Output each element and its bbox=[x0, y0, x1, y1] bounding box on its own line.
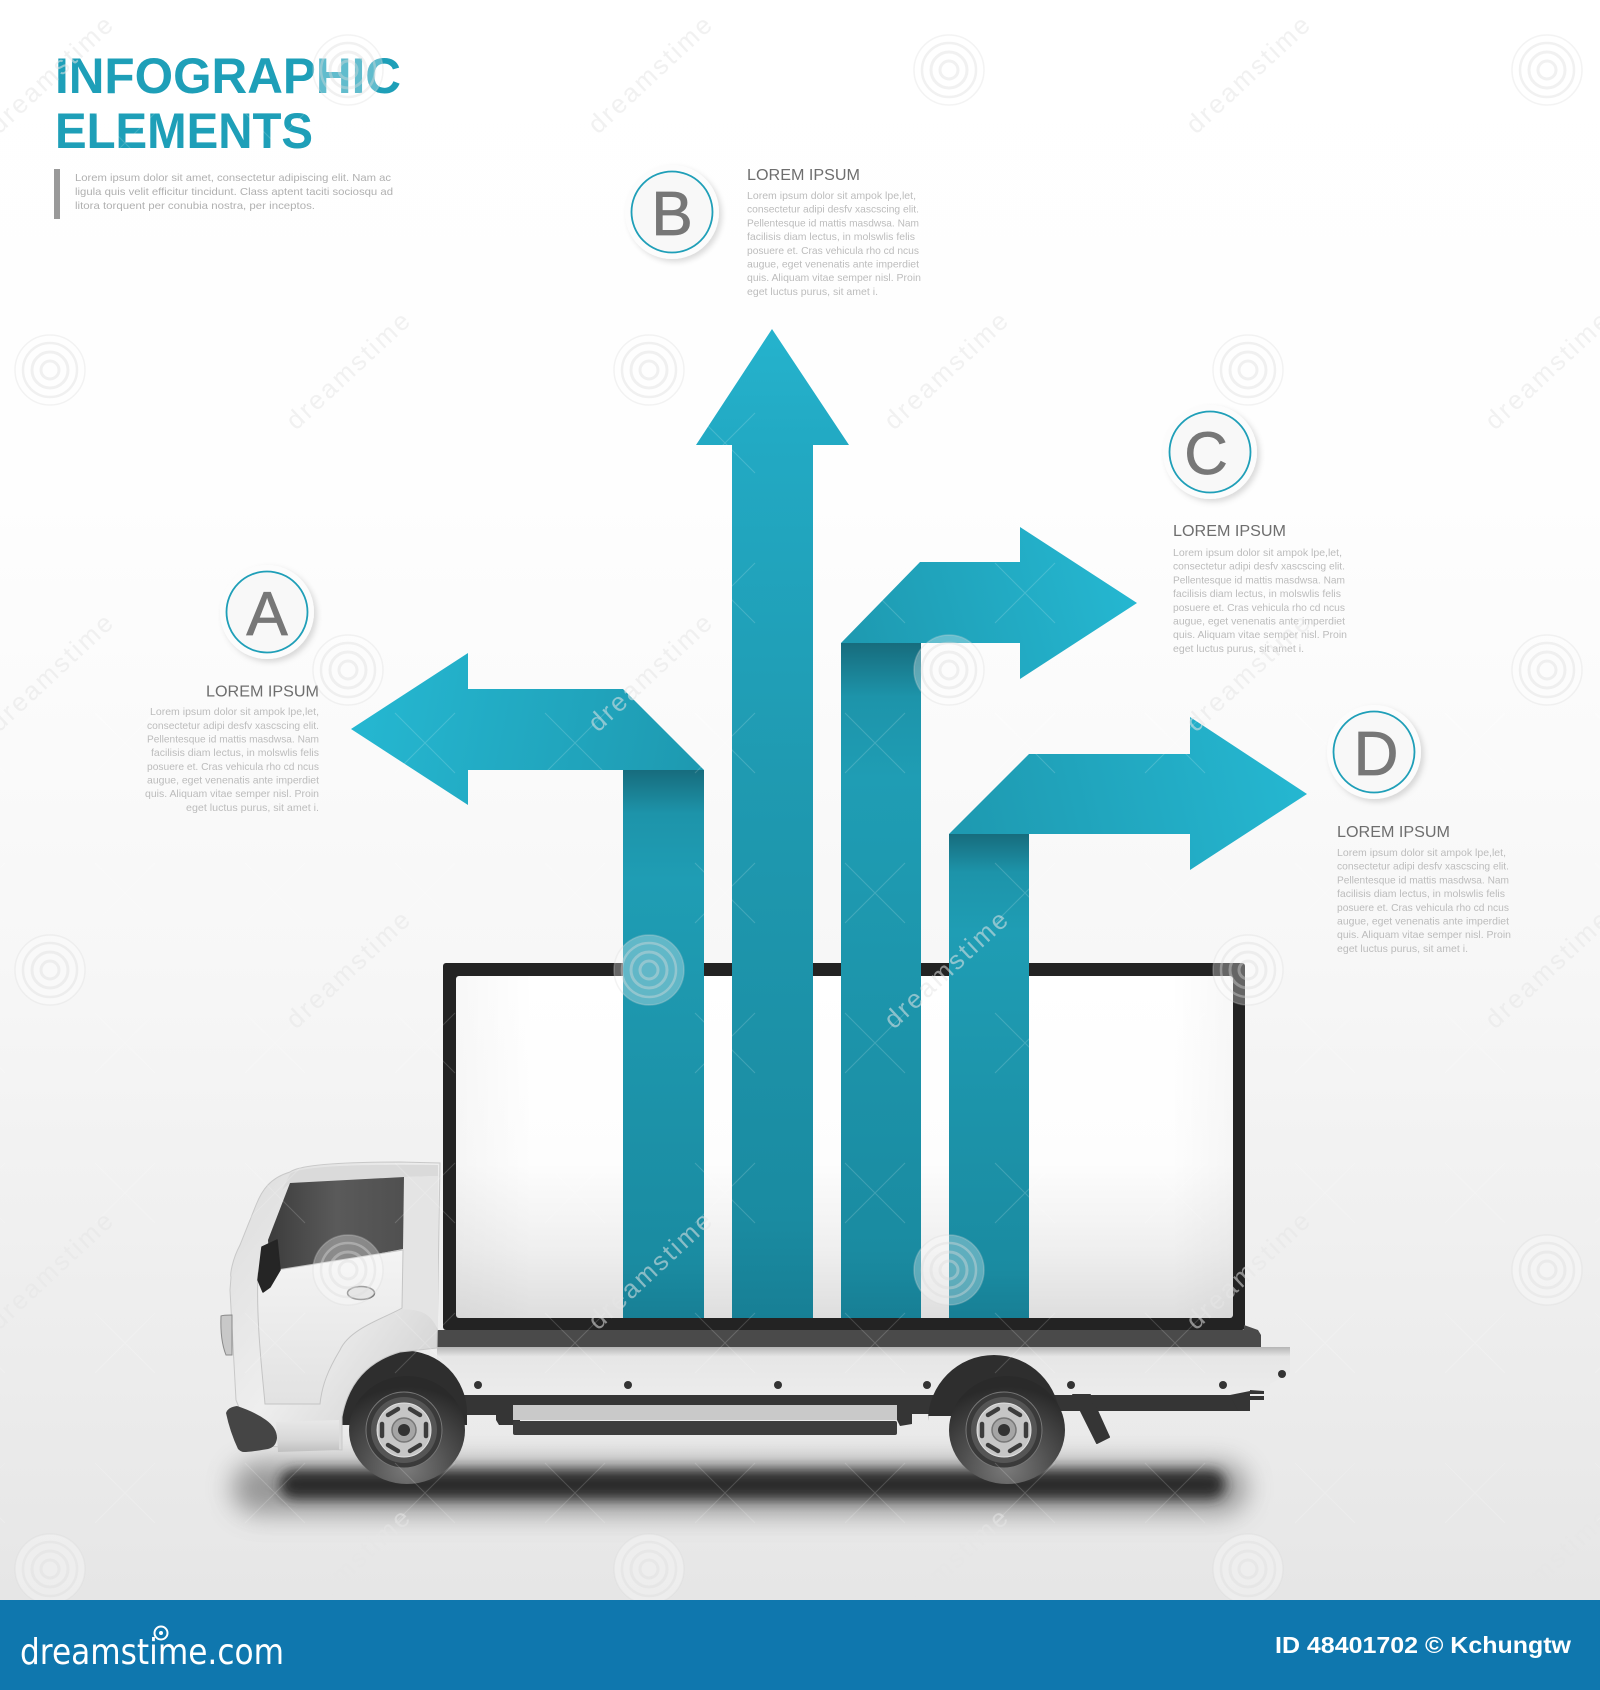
truck billboard screen bbox=[443, 963, 1245, 1330]
intro text block bbox=[54, 169, 393, 219]
truck bbox=[221, 1162, 1290, 1484]
arrow D: right-pointing bbox=[949, 717, 1307, 1318]
body text A: eget luctus purus, sit amet i. bbox=[186, 802, 319, 814]
watermark text: dreamstime bbox=[878, 905, 1014, 1034]
body text C: consectetur adipi desfv xascscing elit. bbox=[1173, 561, 1345, 573]
body text A: augue, eget venenatis ante imperdiet bbox=[147, 774, 319, 786]
watermark text: dreamstime bbox=[1180, 608, 1316, 737]
body text D: consectetur adipi desfv xascscing elit. bbox=[1337, 861, 1509, 873]
watermark text: dreamstime bbox=[1180, 10, 1316, 139]
watermark text: dreamstime bbox=[1180, 1206, 1316, 1335]
body text A bbox=[145, 706, 319, 814]
body text B bbox=[747, 190, 921, 298]
body text A: consectetur adipi desfv xascscing elit. bbox=[147, 720, 319, 732]
title bbox=[55, 48, 401, 159]
badge D: D bbox=[1354, 720, 1398, 789]
badge A: A bbox=[246, 580, 288, 649]
footer credit: ID 48401702 © Kchungtw bbox=[1275, 1632, 1571, 1658]
headlight bbox=[221, 1315, 232, 1355]
body text B: facilisis diam lectus, in molswlis felis bbox=[747, 231, 915, 243]
body text B: posuere et. Cras vehicula rho cd ncus bbox=[747, 245, 919, 257]
body text D: facilisis diam lectus, in molswlis felis bbox=[1337, 888, 1505, 900]
body text B: quis. Aliquam vitae semper nisl. Proin bbox=[747, 272, 921, 284]
body text D: eget luctus purus, sit amet i. bbox=[1337, 943, 1468, 955]
lower bumper bbox=[276, 1420, 339, 1452]
body text C: posuere et. Cras vehicula rho cd ncus bbox=[1173, 602, 1345, 614]
truck deck bar bbox=[437, 1325, 1261, 1347]
body text C bbox=[1173, 547, 1347, 655]
body text C: augue, eget venenatis ante imperdiet bbox=[1173, 616, 1345, 628]
intro text block: Lorem ipsum dolor sit amet, consectetur adipiscing elit. Nam ac bbox=[75, 172, 391, 184]
watermark text: dreamstime bbox=[878, 306, 1014, 435]
badge C: C bbox=[1184, 420, 1228, 487]
label B bbox=[625, 165, 921, 298]
watermark text: dreamstime bbox=[582, 608, 718, 737]
arrow C: right-pointing bbox=[841, 527, 1137, 1318]
label A bbox=[145, 565, 319, 814]
body text B: eget luctus purus, sit amet i. bbox=[747, 286, 878, 298]
body text A: facilisis diam lectus, in molswlis felis bbox=[151, 747, 319, 759]
body text C: quis. Aliquam vitae semper nisl. Proin bbox=[1173, 629, 1347, 641]
footer logo: dreamstime.com bbox=[20, 1632, 284, 1673]
heading B: LOREM IPSUM bbox=[747, 167, 860, 184]
intro text block: litora torquent per conubia nostra, per inceptos. bbox=[75, 200, 315, 212]
body text C: eget luctus purus, sit amet i. bbox=[1173, 643, 1304, 655]
watermark text: dreamstime bbox=[280, 1503, 416, 1632]
truck flatbed body bbox=[437, 1347, 1290, 1395]
body text C: Pellentesque id mattis masdwsa. Nam bbox=[1173, 574, 1345, 586]
label D bbox=[1327, 705, 1511, 955]
truck rivets bbox=[474, 1370, 1286, 1389]
badge B bbox=[625, 165, 719, 259]
cab door bbox=[258, 1250, 403, 1404]
truck wheel arches bbox=[342, 1351, 1060, 1425]
watermark text: dreamstime bbox=[582, 1206, 718, 1335]
cab roof highlight bbox=[282, 1165, 438, 1190]
body text C: facilisis diam lectus, in molswlis felis bbox=[1173, 588, 1341, 600]
body text D: Pellentesque id mattis masdwsa. Nam bbox=[1337, 874, 1509, 886]
front wheel bbox=[349, 1376, 465, 1484]
label C bbox=[1163, 405, 1347, 655]
heading D: LOREM IPSUM bbox=[1337, 824, 1450, 841]
door handle bbox=[348, 1286, 374, 1300]
body text B: Pellentesque id mattis masdwsa. Nam bbox=[747, 217, 919, 229]
rear wheel bbox=[949, 1376, 1065, 1484]
body text D: posuere et. Cras vehicula rho cd ncus bbox=[1337, 902, 1509, 914]
truck cab bbox=[221, 1162, 440, 1452]
truck chassis bbox=[460, 1390, 1264, 1443]
body text D: quis. Aliquam vitae semper nisl. Proin bbox=[1337, 929, 1511, 941]
arrow B: straight up bbox=[696, 329, 849, 1318]
body text D bbox=[1337, 847, 1511, 955]
truck shadow bbox=[232, 1462, 1247, 1514]
badge B: B bbox=[651, 180, 693, 249]
title: INFOGRAPHIC bbox=[55, 48, 401, 104]
truck side step bbox=[513, 1405, 897, 1435]
watermark text: dreamstime bbox=[582, 10, 718, 139]
cab window bbox=[268, 1177, 404, 1274]
body text A: Lorem ipsum dolor sit ampok lpe,let, bbox=[150, 706, 319, 718]
body text A: quis. Aliquam vitae semper nisl. Proin bbox=[145, 788, 319, 800]
body text B: Lorem ipsum dolor sit ampok lpe,let, bbox=[747, 190, 916, 202]
body text C: Lorem ipsum dolor sit ampok lpe,let, bbox=[1173, 547, 1342, 559]
title: ELEMENTS bbox=[55, 103, 313, 159]
body text A: Pellentesque id mattis masdwsa. Nam bbox=[147, 734, 319, 746]
watermark text: dreamstime bbox=[878, 1503, 1014, 1632]
intro text block: ligula quis velit efficitur tincidunt. Class aptent taciti sociosqu ad bbox=[75, 186, 393, 198]
badge C bbox=[1163, 405, 1257, 499]
footer banner bbox=[0, 1600, 1600, 1690]
body text A: posuere et. Cras vehicula rho cd ncus bbox=[147, 761, 319, 773]
badge D bbox=[1327, 705, 1421, 799]
cab pillar bbox=[402, 1176, 438, 1330]
heading A: LOREM IPSUM bbox=[206, 684, 319, 700]
badge A bbox=[220, 565, 314, 659]
watermark text: dreamstime bbox=[280, 905, 416, 1034]
body text D: augue, eget venenatis ante imperdiet bbox=[1337, 916, 1509, 928]
watermark text: dreamstime bbox=[280, 306, 416, 435]
arrow A: left-pointing bbox=[351, 653, 704, 1318]
body text D: Lorem ipsum dolor sit ampok lpe,let, bbox=[1337, 847, 1506, 859]
front bumper bbox=[226, 1406, 277, 1452]
body text B: augue, eget venenatis ante imperdiet bbox=[747, 258, 919, 270]
body text B: consectetur adipi desfv xascscing elit. bbox=[747, 204, 919, 216]
heading C: LOREM IPSUM bbox=[1173, 523, 1286, 540]
side mirror bbox=[258, 1240, 280, 1292]
